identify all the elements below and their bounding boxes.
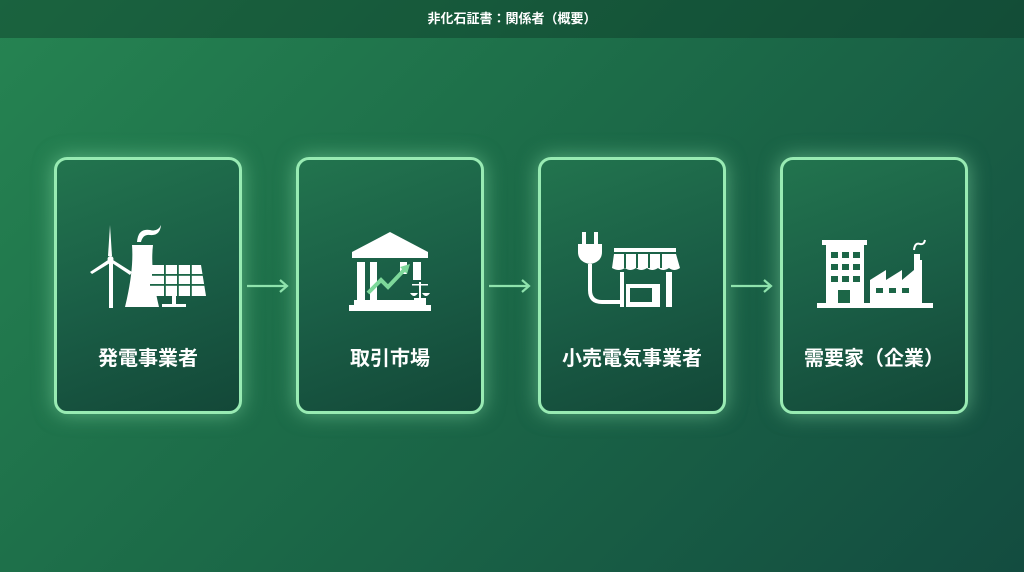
label: 取引市場	[350, 348, 430, 370]
icon: plug and store	[578, 232, 680, 307]
title: 非化石証書：関係者（概要）	[427, 11, 596, 26]
panel: retailer	[538, 157, 726, 414]
panel: market	[296, 157, 484, 414]
icon: power plants	[90, 225, 206, 308]
arrow 2	[489, 279, 530, 293]
label: 発電事業者	[98, 348, 198, 370]
label: 小売電気事業者	[562, 348, 702, 370]
arrow 3	[731, 279, 772, 293]
panel: consumer	[780, 157, 968, 414]
panel: generator	[54, 157, 242, 414]
title	[0, 0, 1024, 38]
label: 需要家（企業）	[804, 348, 944, 370]
arrow 1	[247, 279, 288, 293]
icon: exchange building	[349, 232, 431, 311]
icon: office and factory	[817, 240, 933, 308]
